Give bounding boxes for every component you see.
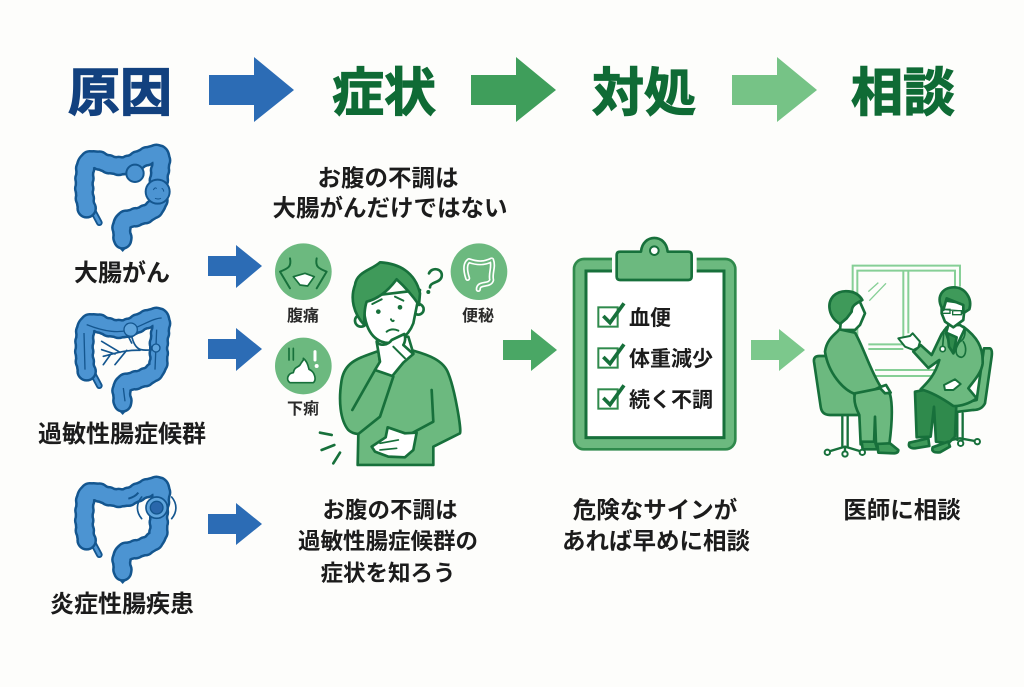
hand on chin — [375, 334, 413, 376]
icon: diarrhea — [275, 338, 332, 394]
text: お腹の不調は大腸がんだけではない: 大腸がんだけではない — [272, 194, 508, 221]
arrow: symptoms to checklist — [503, 329, 557, 371]
label: 炎症性腸疾患: 炎症性腸疾患 — [50, 591, 194, 618]
icon: colon with mesentery nerves — [84, 317, 162, 415]
question mark — [429, 269, 442, 287]
text: 危険なサインがあれば早めに相談: あれば早めに相談 — [562, 528, 750, 554]
text: お腹の不調は過敏性腸症候群の症状を知ろう — [298, 498, 478, 586]
text: 危険なサインがあれば早めに相談 — [562, 496, 750, 554]
patient — [825, 291, 898, 453]
checkbox 2 — [598, 348, 618, 368]
arrow: 大腸がん to symptoms — [208, 245, 262, 288]
arrow: 症状 to 対処 — [471, 57, 556, 122]
doctor — [898, 287, 983, 452]
icon: worried man — [320, 262, 460, 465]
icon: abdominal pain — [275, 243, 332, 300]
ears — [355, 315, 367, 327]
face — [364, 290, 420, 343]
label: 下痢: 下痢 — [287, 400, 319, 418]
doctor chair — [943, 348, 992, 446]
hair — [353, 262, 420, 325]
text: 医師に相談: 医師に相談 — [843, 497, 961, 523]
label: 大腸がん: 大腸がん — [74, 259, 170, 287]
icon: colon with tumor — [84, 154, 170, 252]
arrow: 原因 to 症状 — [209, 57, 294, 122]
heading: 症状: 症状 — [332, 65, 436, 123]
text: お腹の不調は過敏性腸症候群の症状を知ろう: お腹の不調は — [322, 498, 458, 523]
checkbox 3 — [598, 389, 618, 409]
icon: clipboard checklist — [574, 238, 735, 449]
face details — [376, 309, 381, 314]
label: 便秘: 便秘 — [462, 307, 494, 325]
checklist text: 体重減少 — [629, 347, 713, 371]
neck — [377, 337, 413, 363]
text: お腹の不調は大腸がんだけではない — [272, 165, 508, 221]
label: 過敏性腸症候群: 過敏性腸症候群 — [38, 421, 206, 448]
label: 腹痛: 腹痛 — [287, 306, 319, 325]
arrow: 対処 to 相談 — [732, 57, 817, 122]
checkbox 1 — [598, 307, 618, 327]
text: お腹の不調は過敏性腸症候群の症状を知ろう: 過敏性腸症候群の — [298, 529, 478, 554]
text: 危険なサインがあれば早めに相談: 危険なサインが — [573, 496, 738, 523]
arrow: checklist to doctor — [751, 329, 805, 371]
illustration: consultation with doctor — [814, 266, 992, 457]
sweater — [340, 351, 460, 465]
heading: 対処: 対処 — [592, 65, 696, 123]
hand on belly — [372, 427, 417, 457]
window — [853, 266, 960, 376]
pain lines — [320, 433, 340, 463]
checklist text: 血便 — [629, 307, 671, 330]
heading: 相談: 相談 — [851, 65, 955, 123]
checklist text: 続く不調 — [629, 389, 713, 412]
text: お腹の不調は過敏性腸症候群の症状を知ろう: 症状を知ろう — [320, 561, 456, 586]
arrow: 炎症性腸疾患 to symptoms — [208, 503, 262, 545]
heading: 原因: 原因 — [68, 65, 172, 123]
checklist text — [629, 307, 713, 412]
icon: colon with inflammation — [84, 486, 176, 584]
arrow: 過敏性腸症候群 to symptoms — [208, 328, 262, 371]
text: お腹の不調は大腸がんだけではない: お腹の不調は — [318, 165, 458, 191]
icon: constipation — [451, 243, 507, 300]
patient chair — [814, 356, 877, 457]
